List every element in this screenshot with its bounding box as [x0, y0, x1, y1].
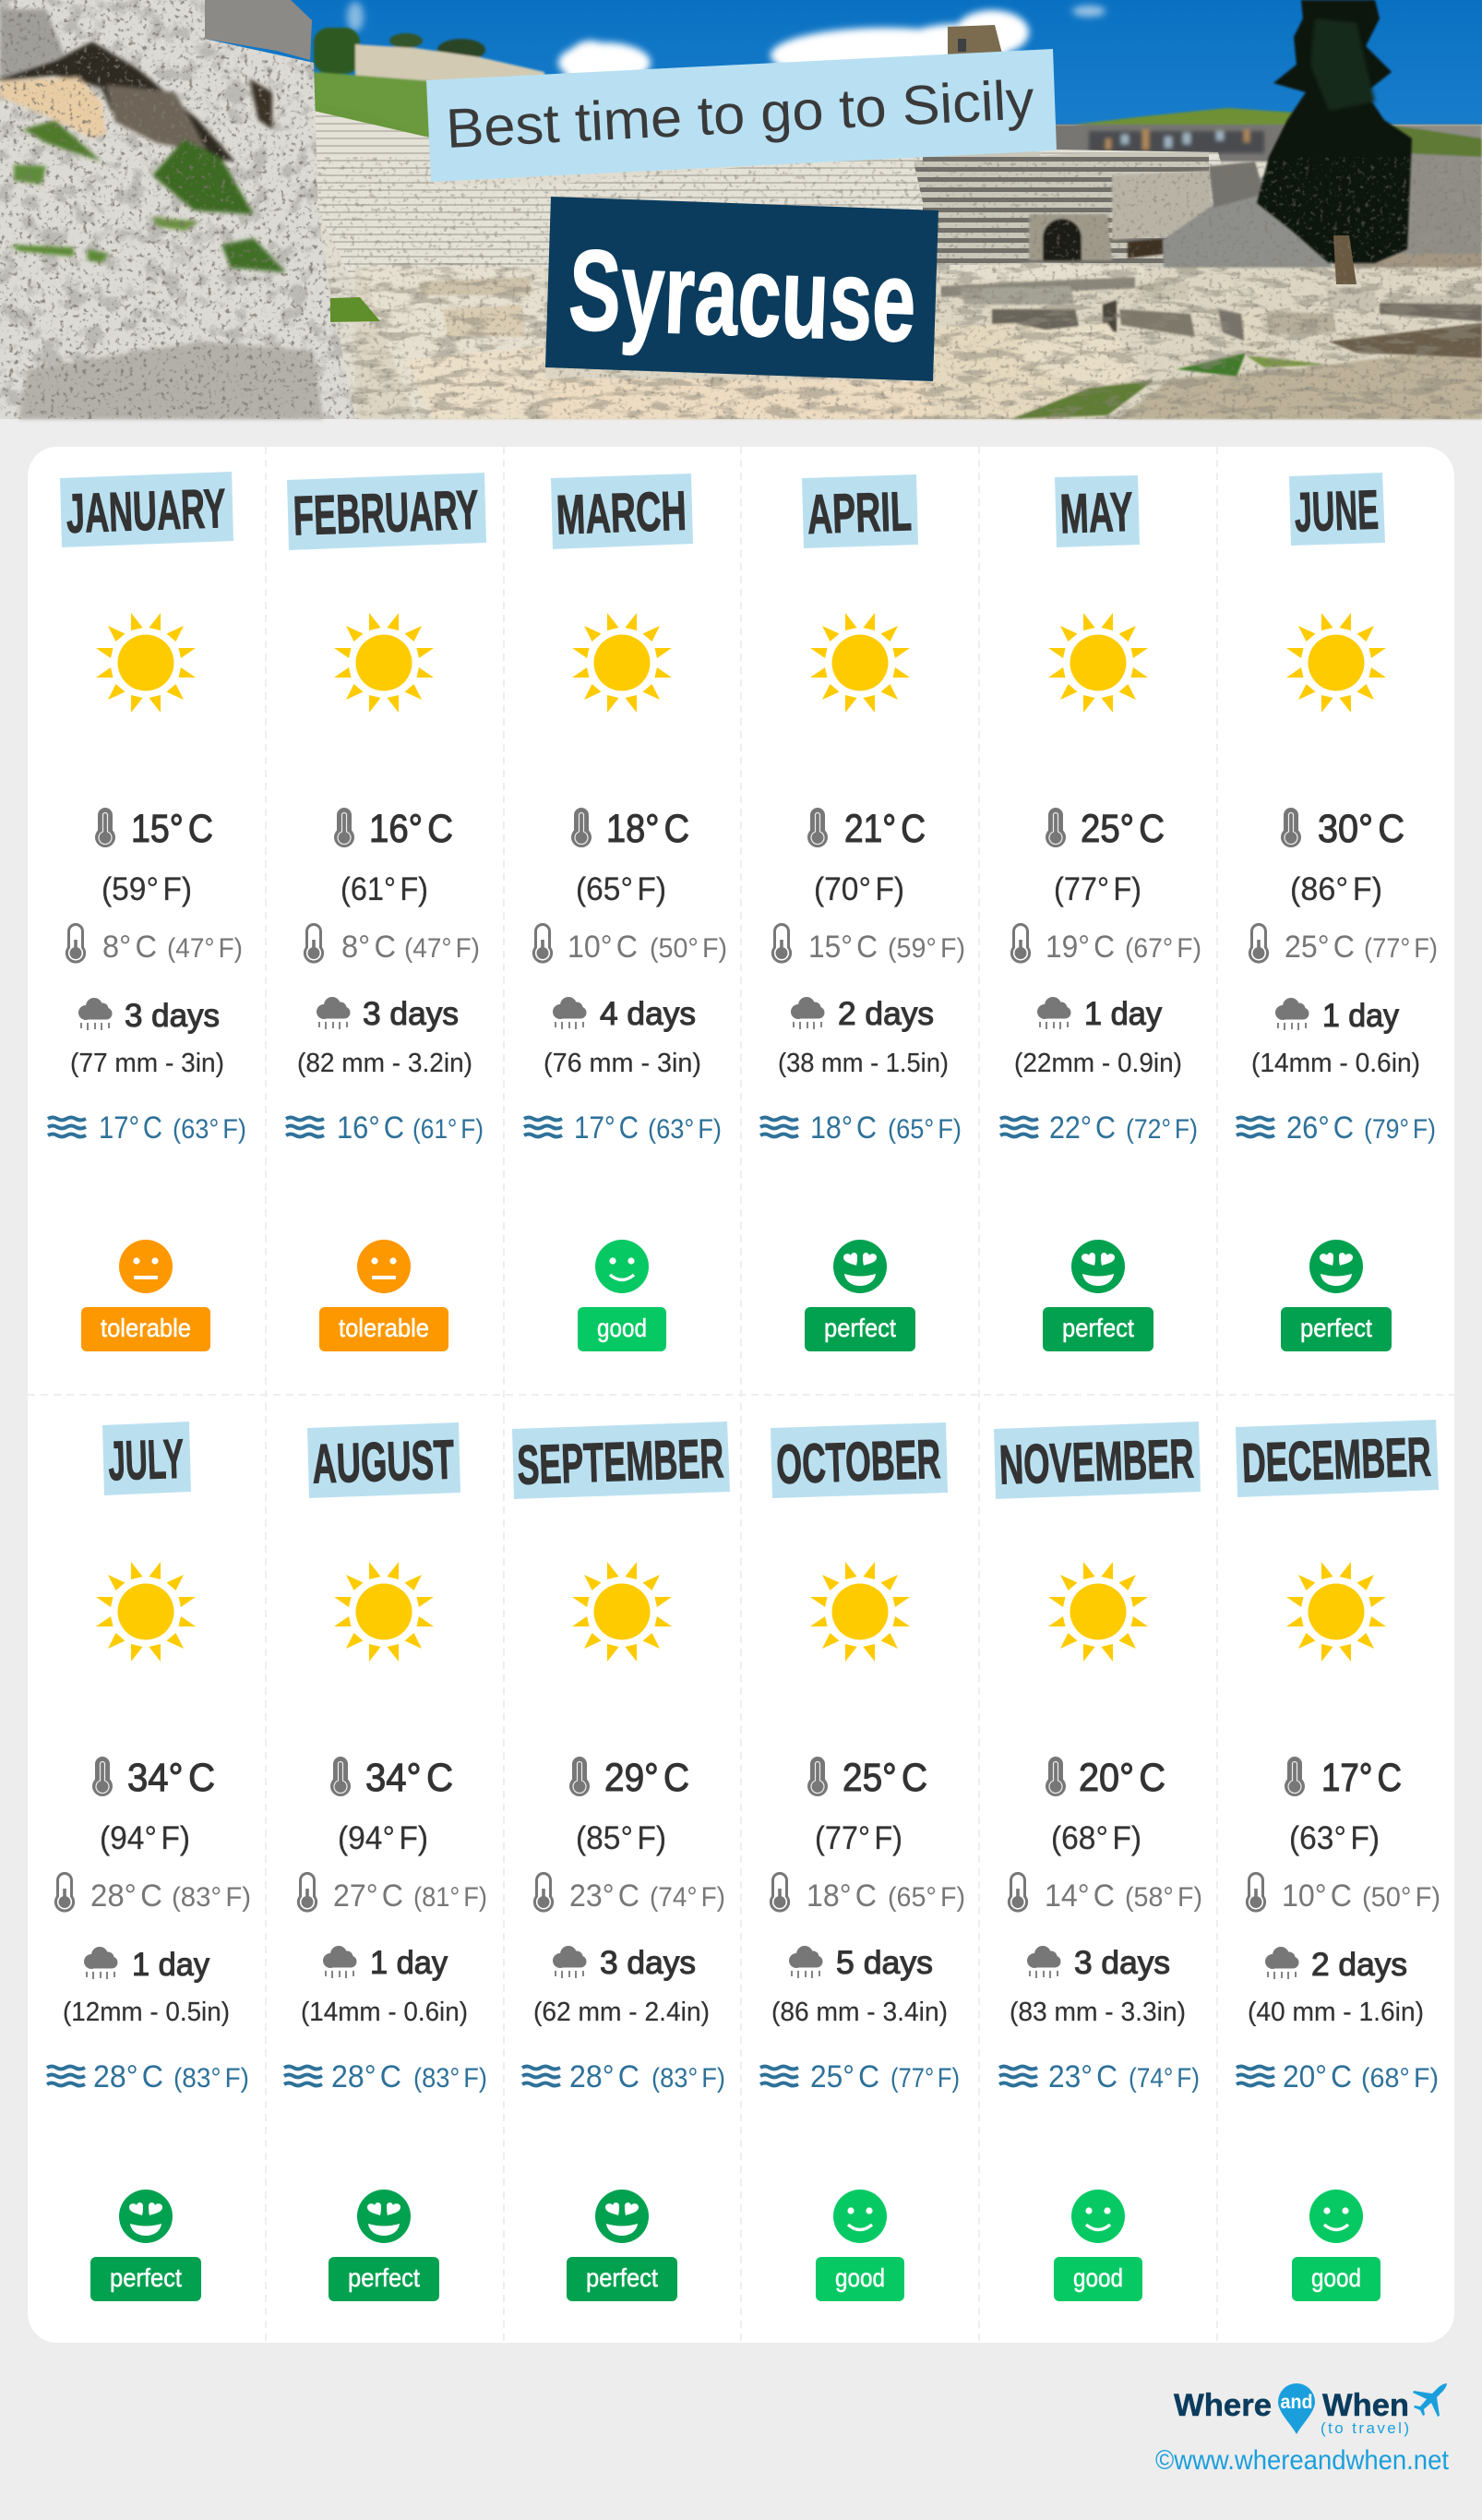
panel: March [524, 474, 727, 1351]
rating: tolerable [81, 1240, 210, 1351]
weather data: 17° C [1321, 1756, 1402, 1800]
weather data: (86 mm - 3.4in) [771, 1998, 948, 2027]
weather data: (12mm - 0.5in) [63, 1998, 230, 2027]
weather data: (40 mm - 1.6in) [1248, 1998, 1424, 2027]
weather data: 8° C [102, 930, 157, 965]
icon: sun [334, 1562, 434, 1662]
month label: August [307, 1422, 460, 1498]
weather data: 20° C [1283, 2059, 1352, 2094]
weather data: 8° C [341, 930, 396, 965]
rating: good: good [1311, 2263, 1361, 2292]
rating: perfect: perfect [586, 2263, 658, 2292]
weather data: (85° F) [576, 1820, 666, 1856]
weather data: (68° F) [1051, 1820, 1141, 1856]
weather data: (47° F) [167, 933, 243, 964]
banner: Syracuse [545, 197, 938, 381]
month label: October [771, 1422, 948, 1498]
rating: perfect [1043, 1240, 1153, 1351]
icon: sun [96, 1562, 196, 1662]
weather data: 3 days [363, 996, 459, 1032]
weather data: (14mm - 0.6in) [1251, 1049, 1420, 1078]
weather data: 25° C [843, 1756, 927, 1800]
weather data: 28° C [93, 2059, 163, 2094]
weather data: (82 mm - 3.2in) [297, 1049, 472, 1078]
weather data: 34° C [365, 1756, 453, 1800]
weather data: 22° C [1049, 1110, 1116, 1146]
weather data: 2 days [838, 996, 934, 1032]
weather data: (86° F) [1290, 871, 1382, 907]
weather data: 18° C [807, 1878, 877, 1914]
month label: February [287, 473, 486, 550]
weather data: (65° F) [888, 1882, 965, 1913]
weather data: 1 day [132, 1947, 209, 1983]
weather data [760, 807, 965, 1146]
weather data: 2 days [1311, 1947, 1407, 1983]
rating: good [1292, 2190, 1380, 2301]
weather data: 23° C [1048, 2059, 1117, 2094]
rating: perfect: perfect [348, 2263, 420, 2292]
icon: sun [96, 613, 196, 713]
weather data: (38 mm - 1.5in) [778, 1049, 949, 1078]
weather data: 1 day [1322, 998, 1399, 1034]
month label: June: JUNE [1294, 478, 1380, 544]
weather data: (22mm - 0.9in) [1014, 1049, 1182, 1078]
panel: May [1000, 475, 1201, 1351]
weather data: (77 mm - 3in) [70, 1049, 224, 1078]
weather data: (63° F) [1289, 1820, 1380, 1856]
month label: February: FEBRUARY [293, 479, 480, 546]
weather data: (62 mm - 2.4in) [533, 1998, 710, 2027]
panel: December [1236, 1420, 1440, 2301]
rating: good [816, 2190, 904, 2301]
weather data [286, 807, 484, 1146]
icon: sun [1286, 1562, 1386, 1662]
panel: July [47, 1422, 251, 2301]
month label: May [1055, 475, 1140, 547]
panel: April [760, 474, 965, 1351]
banner: Best time to go to Sicily [426, 49, 1057, 182]
weather data: 5 days [836, 1945, 933, 1981]
weather data: (77° F) [890, 2063, 960, 2094]
weather data: (79° F) [1364, 1114, 1436, 1145]
logo: Where and When [1174, 2383, 1447, 2437]
rating: good: good [1073, 2263, 1123, 2292]
rating: tolerable [319, 1240, 448, 1351]
rating: good: good [835, 2263, 885, 2292]
icon: map pin [1278, 2383, 1315, 2434]
month label: March: MARCH [556, 480, 687, 546]
weather data: (65° F) [888, 1114, 962, 1145]
rating: perfect: perfect [110, 2263, 182, 2292]
weather data: 23° C [569, 1878, 639, 1914]
rating: perfect: perfect [1300, 1314, 1372, 1342]
weather data: 18° C [606, 807, 689, 851]
weather data: 28° C [331, 2059, 401, 2094]
weather data: 27° C [333, 1878, 403, 1914]
header photo: Greek theatre of Syracuse [0, 0, 1482, 419]
weather data [1000, 807, 1201, 1146]
month label: October: OCTOBER [775, 1428, 941, 1495]
weather data [47, 1756, 251, 2094]
weather data: (83 mm - 3.3in) [1010, 1998, 1186, 2027]
weather data: 16° C [337, 1110, 404, 1146]
weather data: 10° C [568, 930, 638, 965]
month label: July: JULY [107, 1428, 185, 1492]
weather data: (59° F) [888, 933, 965, 964]
panel: November [994, 1422, 1202, 2301]
icon: sun [1048, 1562, 1148, 1662]
weather data: 15° C [808, 930, 878, 965]
weather data: 26° C [1286, 1110, 1354, 1146]
weather data: (83° F) [172, 1882, 251, 1913]
weather data: 28° C [90, 1878, 162, 1914]
weather data: (63° F) [173, 1114, 246, 1145]
month label: April [802, 474, 918, 548]
weather data: (77° F) [1054, 871, 1141, 907]
weather data: 4 days [600, 996, 696, 1032]
rating: perfect [567, 2190, 677, 2301]
icon: sun [810, 613, 910, 713]
weather data: 30° C [1318, 807, 1404, 851]
weather data: 19° C [1046, 930, 1115, 965]
weather data [999, 1756, 1202, 2094]
weather data: 1 day [370, 1945, 448, 1981]
weather data: (74° F) [1129, 2063, 1200, 2094]
rating: perfect: perfect [1062, 1314, 1134, 1342]
weather data: (83° F) [651, 2063, 725, 2094]
weather data: (50° F) [650, 933, 727, 964]
rating: perfect [805, 1240, 915, 1351]
month label: March [551, 474, 693, 549]
banner: Syracuse: Syracuse [567, 226, 918, 366]
weather data: 17° C [574, 1110, 639, 1146]
icon: airplane [1413, 2383, 1447, 2417]
icon: sun [572, 613, 672, 713]
month label: September: SEPTEMBER [516, 1427, 724, 1496]
weather data: (77° F) [815, 1820, 902, 1856]
white calendar panel [28, 447, 1454, 2343]
month label: May: MAY [1059, 481, 1134, 545]
weather data: (63° F) [648, 1114, 722, 1145]
icon: map pin: and [1281, 2392, 1312, 2413]
weather data: 17° C [99, 1110, 162, 1146]
rating: perfect [1281, 1240, 1392, 1351]
weather data: (72° F) [1126, 1114, 1198, 1145]
weather data [1237, 1756, 1440, 2094]
weather data: (94° F) [100, 1820, 190, 1856]
panel: August [284, 1422, 487, 2301]
month label: January [60, 472, 233, 547]
weather data: (70° F) [814, 871, 904, 907]
weather data: 15° C [131, 807, 213, 851]
weather data: 29° C [604, 1756, 689, 1800]
rating: good [578, 1240, 666, 1351]
month label: August: AUGUST [311, 1428, 455, 1495]
weather data: (83° F) [413, 2063, 487, 2094]
weather data: (94° F) [338, 1820, 428, 1856]
weather data: (77° F) [1364, 933, 1438, 964]
weather data [1237, 807, 1438, 1146]
rating: good: good [597, 1314, 647, 1342]
month label: November [994, 1422, 1201, 1499]
weather data [284, 1756, 487, 2094]
month label: September [512, 1422, 730, 1499]
weather data: 14° C [1045, 1878, 1115, 1914]
rating: tolerable: tolerable [339, 1314, 429, 1342]
weather data: 10° C [1282, 1878, 1352, 1914]
weather data [522, 1756, 725, 2094]
weather data: 25° C [1285, 930, 1355, 965]
weather data: 3 days [600, 1945, 696, 1981]
weather data: (67° F) [1125, 933, 1201, 964]
weather data: (47° F) [404, 933, 480, 964]
weather data: 20° C [1079, 1756, 1165, 1800]
weather data: 25° C [810, 2059, 879, 2094]
panel: January [48, 472, 246, 1351]
weather data [48, 807, 246, 1146]
icon: sun [572, 1562, 672, 1662]
weather data [760, 1756, 965, 2094]
weather data: 16° C [369, 807, 453, 851]
weather data: (83° F) [173, 2063, 249, 2094]
weather data: (50° F) [1362, 1882, 1440, 1913]
panel: February [286, 473, 486, 1351]
month label: January: JANUARY [66, 477, 227, 545]
rating: perfect [90, 2190, 201, 2301]
rating: perfect [329, 2190, 439, 2301]
panel: June [1237, 473, 1438, 1351]
weather data: 21° C [844, 807, 926, 851]
weather data: (61° F) [341, 871, 428, 907]
logo: Where and When: When [1322, 2388, 1409, 2423]
weather data: (68° F) [1361, 2063, 1439, 2094]
weather data: 28° C [569, 2059, 639, 2094]
weather data: 34° C [127, 1756, 215, 1800]
icon: sun [1286, 613, 1386, 713]
weather data: (58° F) [1125, 1882, 1202, 1913]
weather data: (81° F) [413, 1882, 487, 1913]
weather data: 1 day [1084, 996, 1162, 1032]
banner: Best time to go to Sicily: Best time to go to Sicily [445, 68, 1035, 160]
month label: July [102, 1422, 191, 1495]
weather data: 3 days [1074, 1945, 1170, 1981]
icon: sun [810, 1562, 910, 1662]
rating: good [1054, 2190, 1142, 2301]
website credit: ©www.whereandwhen.net [1155, 2445, 1450, 2476]
weather data [524, 807, 727, 1146]
weather data: (59° F) [102, 871, 192, 907]
weather data: (61° F) [412, 1114, 484, 1145]
icon: sun [1048, 613, 1148, 713]
icon: sun [334, 613, 434, 713]
logo: Where and When: (to travel) [1321, 2419, 1409, 2437]
rating: tolerable: tolerable [101, 1314, 191, 1342]
weather data: (65° F) [576, 871, 666, 907]
weather data: (76 mm - 3in) [544, 1049, 701, 1078]
month label: November: NOVEMBER [998, 1427, 1195, 1496]
panel: September [512, 1422, 730, 2301]
month label: April: APRIL [807, 480, 913, 546]
logo: Where and When: Where [1174, 2388, 1272, 2423]
weather data: (14mm - 0.6in) [301, 1998, 468, 2027]
weather data: 18° C [810, 1110, 877, 1146]
weather data: (74° F) [650, 1882, 725, 1913]
rating: perfect: perfect [824, 1314, 896, 1342]
weather data: 25° C [1081, 807, 1165, 851]
panel: October [760, 1422, 965, 2301]
weather data: 3 days [125, 998, 220, 1034]
month label: June [1289, 473, 1385, 546]
